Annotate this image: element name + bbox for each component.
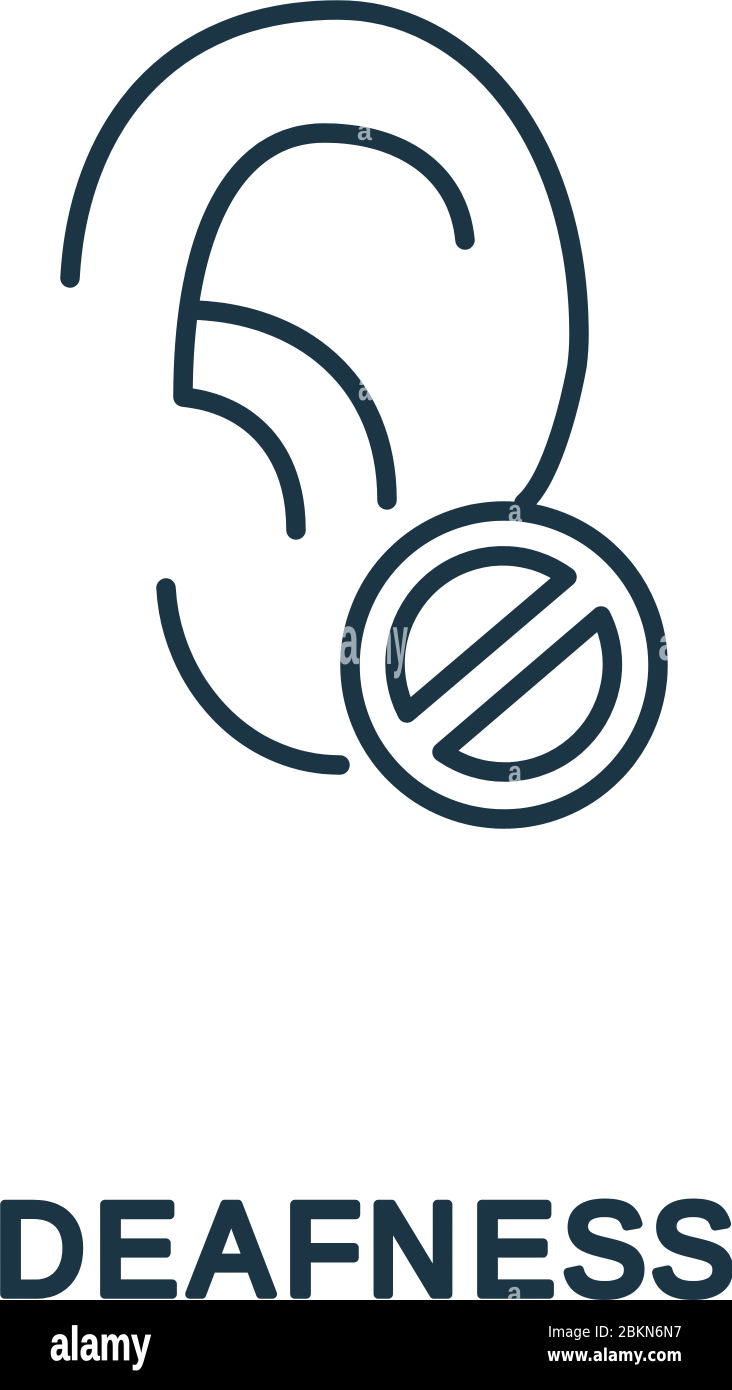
prohibition ring <box>350 511 658 819</box>
ear: lower lobe <box>166 588 340 765</box>
watermark marks: a <box>508 754 522 790</box>
watermark marks: a <box>358 365 372 409</box>
watermark marks: a <box>507 1275 522 1311</box>
watermark marks: a <box>338 601 360 679</box>
watermark marks: a <box>508 493 522 529</box>
prohibition: lower half segment <box>442 616 612 772</box>
ear: outer contour <box>70 10 579 503</box>
watermark marks: a <box>658 617 681 670</box>
footer: website: www.alamy.com <box>547 1345 682 1366</box>
ear: inner fold <box>183 133 465 530</box>
footer: image id: Image ID: 2BKN6N7 <box>548 1323 682 1341</box>
icon: ear with prohibition sign <box>70 10 658 819</box>
ear: middle fold <box>190 310 387 500</box>
title: DEAFNESS: DEAFNESS <box>0 1178 732 1323</box>
prohibition: upper half segment <box>395 556 567 713</box>
watermark marks <box>338 115 681 1311</box>
footer bar <box>0 1300 732 1390</box>
footer: alamy logo: alamy <box>50 1317 151 1370</box>
watermark marks: my <box>368 601 408 679</box>
watermark marks: a <box>357 115 372 146</box>
